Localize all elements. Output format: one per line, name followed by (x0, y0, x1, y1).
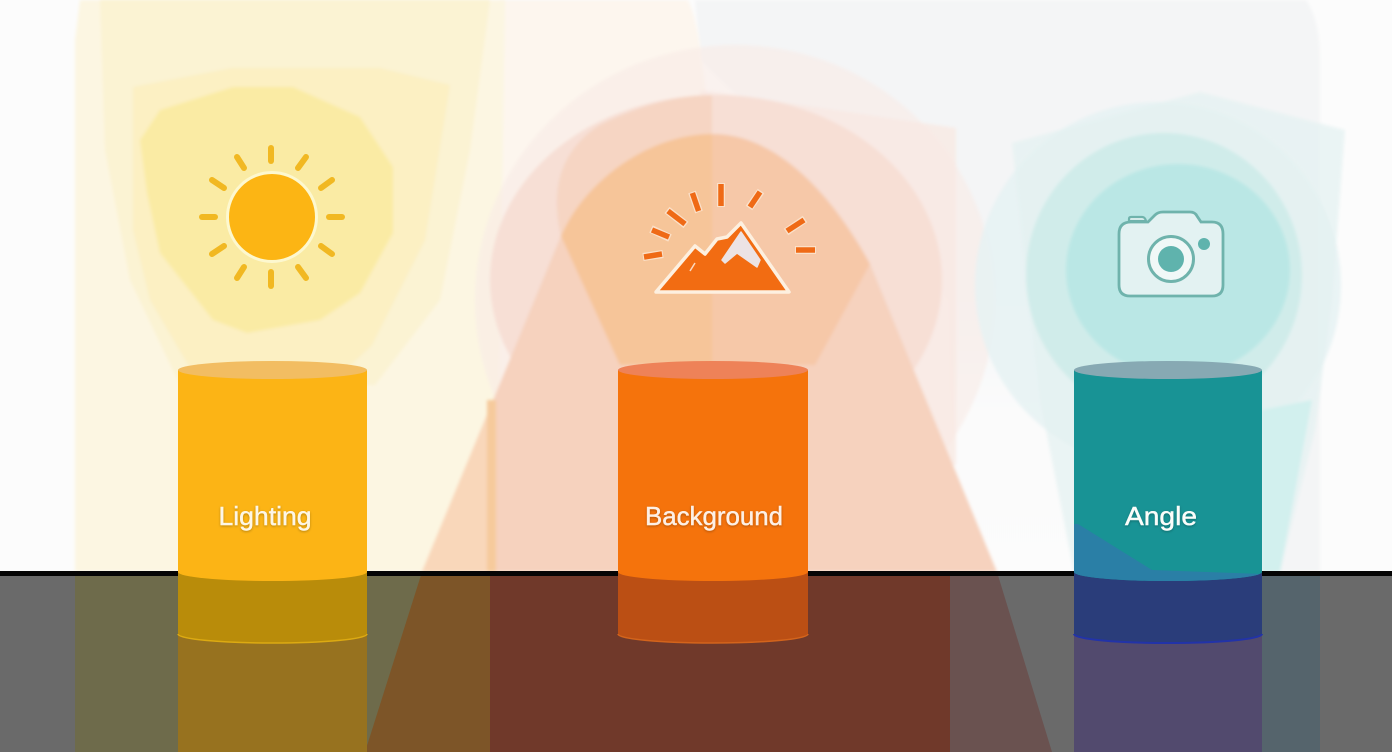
cylinder body (178, 370, 367, 581)
panel: pale orange column (503, 0, 698, 182)
icon: sun (202, 148, 342, 286)
shadow wedge (1074, 524, 1260, 581)
light cone (493, 238, 998, 571)
floor segment (618, 572, 808, 643)
dome (490, 95, 942, 368)
background light layers (75, 0, 1345, 572)
orange halo (422, 45, 997, 572)
floor (0, 571, 1392, 752)
yellow halo (100, 0, 490, 385)
label: Angle: Angle (1125, 501, 1197, 531)
cylinder top (618, 361, 808, 379)
central wedge (561, 134, 712, 365)
teal halo (975, 92, 1345, 572)
cylinder body (618, 370, 808, 581)
vertical stripe (487, 400, 496, 572)
icon: camera (1119, 212, 1223, 296)
cylinder top (1074, 361, 1262, 379)
angled pale panel (916, 124, 956, 464)
cylinder top (178, 361, 367, 379)
reflection (1074, 634, 1262, 752)
floor segment (1074, 572, 1262, 643)
label: Lighting: Lighting (218, 501, 312, 531)
cylinder body (1074, 370, 1262, 581)
panel: grey light column (695, 0, 1320, 572)
reflection (618, 634, 808, 752)
icon: mountain with rays (643, 183, 816, 292)
cone left overlap (557, 95, 712, 236)
column: Lighting (178, 361, 367, 752)
panel: yellow column (75, 0, 505, 572)
floor segment (178, 572, 367, 643)
label: Background: Background (645, 501, 783, 531)
outer arc (702, 46, 988, 430)
column: Background (618, 361, 808, 752)
column: Angle (1074, 361, 1262, 752)
reflection (178, 634, 367, 752)
